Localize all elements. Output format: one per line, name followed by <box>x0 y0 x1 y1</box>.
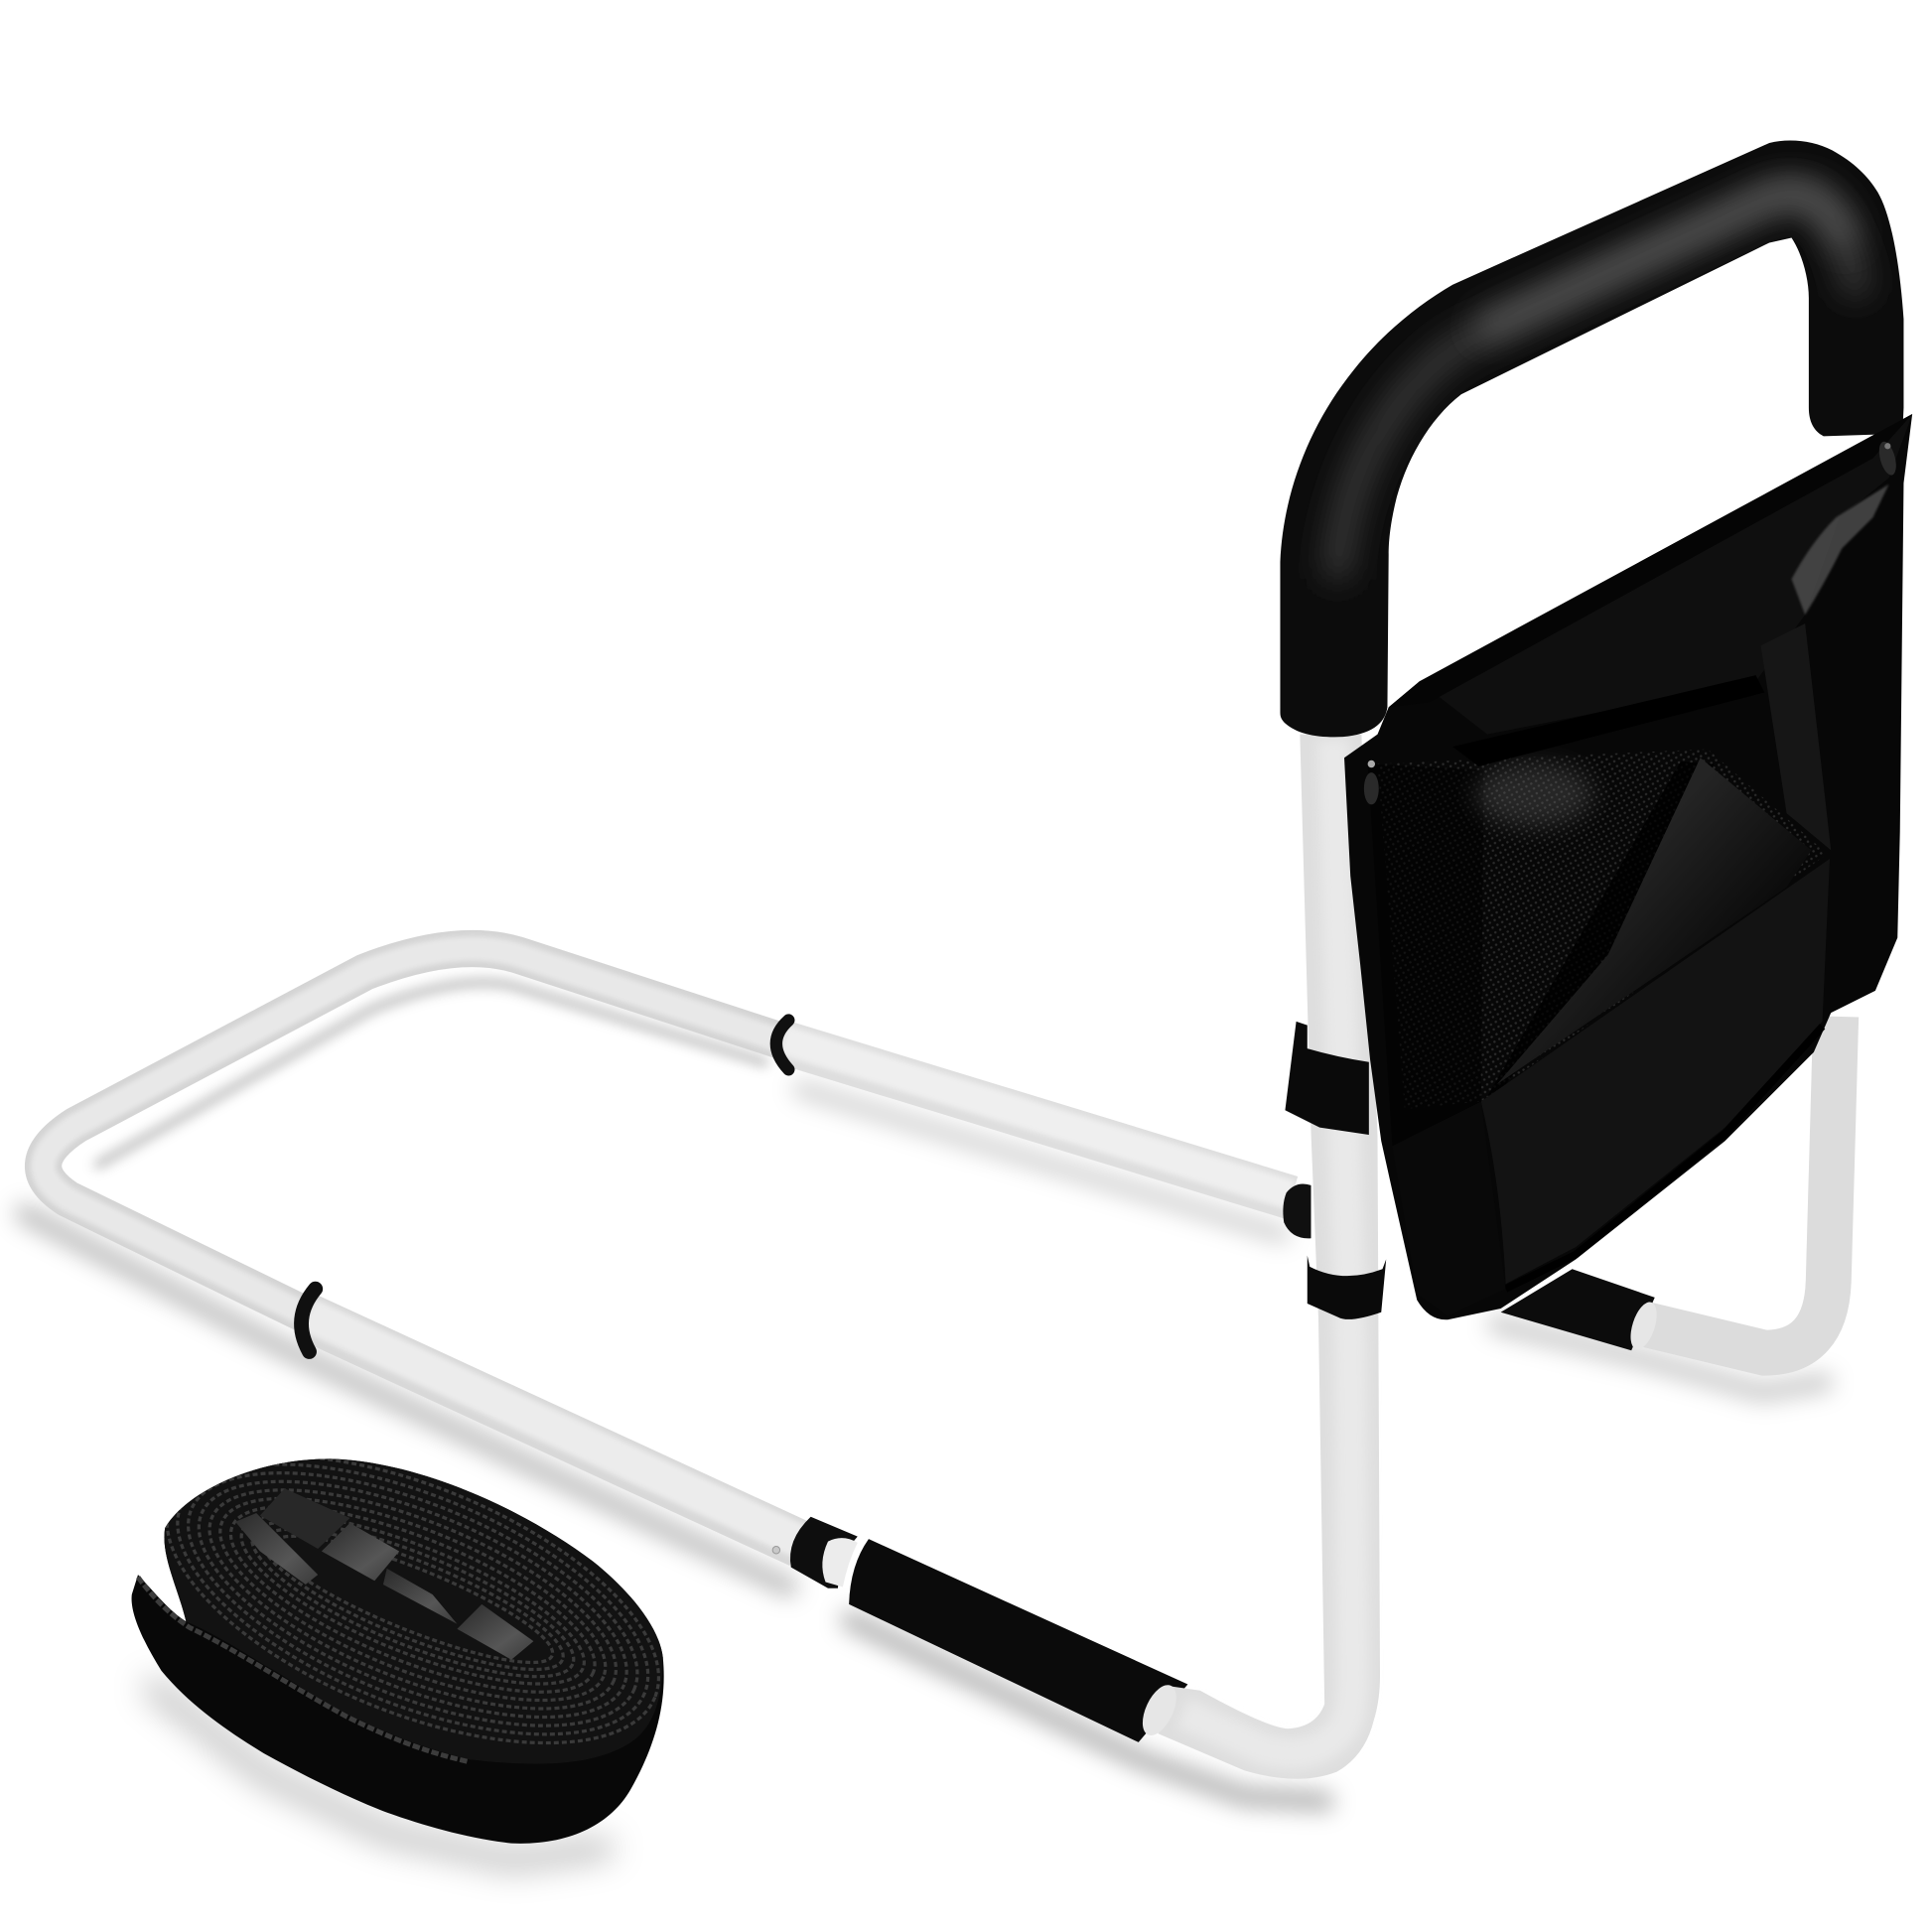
zipper pulls <box>1876 440 1899 477</box>
front side tube <box>308 1314 799 1544</box>
rear rail tube <box>44 948 1292 1319</box>
rail connector ring: rear <box>776 1021 788 1069</box>
buckle <box>235 1488 533 1660</box>
mesh shade left <box>1368 763 1483 1146</box>
rail connector ring: front left <box>302 1289 316 1351</box>
elastic band <box>1481 859 1830 1284</box>
hook-and-loop strap: lower <box>1308 1256 1386 1319</box>
right fold <box>1792 484 1889 615</box>
near foam grip and collar <box>790 1517 1187 1742</box>
mesh highlight <box>1475 762 1593 827</box>
storage pocket <box>1344 414 1912 1319</box>
hook-and-loop strap: upper <box>1285 1022 1369 1135</box>
near bottom tube and upright <box>1136 735 1380 1779</box>
ground shadows <box>25 983 1824 1861</box>
mesh panel <box>1378 750 1828 1109</box>
strap edge <box>138 1578 470 1762</box>
screw <box>772 1547 780 1554</box>
padded handle <box>1280 140 1903 737</box>
far foot tube and foam <box>1501 1017 1836 1353</box>
black binding under flap <box>1452 675 1764 766</box>
coiled strap <box>131 1458 664 1844</box>
strap top surface <box>164 1458 663 1764</box>
top flap <box>1420 414 1912 735</box>
diagonal mesh fold <box>1487 761 1714 1097</box>
pocket lower left panel <box>1392 1102 1506 1315</box>
rail connector ring: rear joint <box>1283 1183 1311 1238</box>
